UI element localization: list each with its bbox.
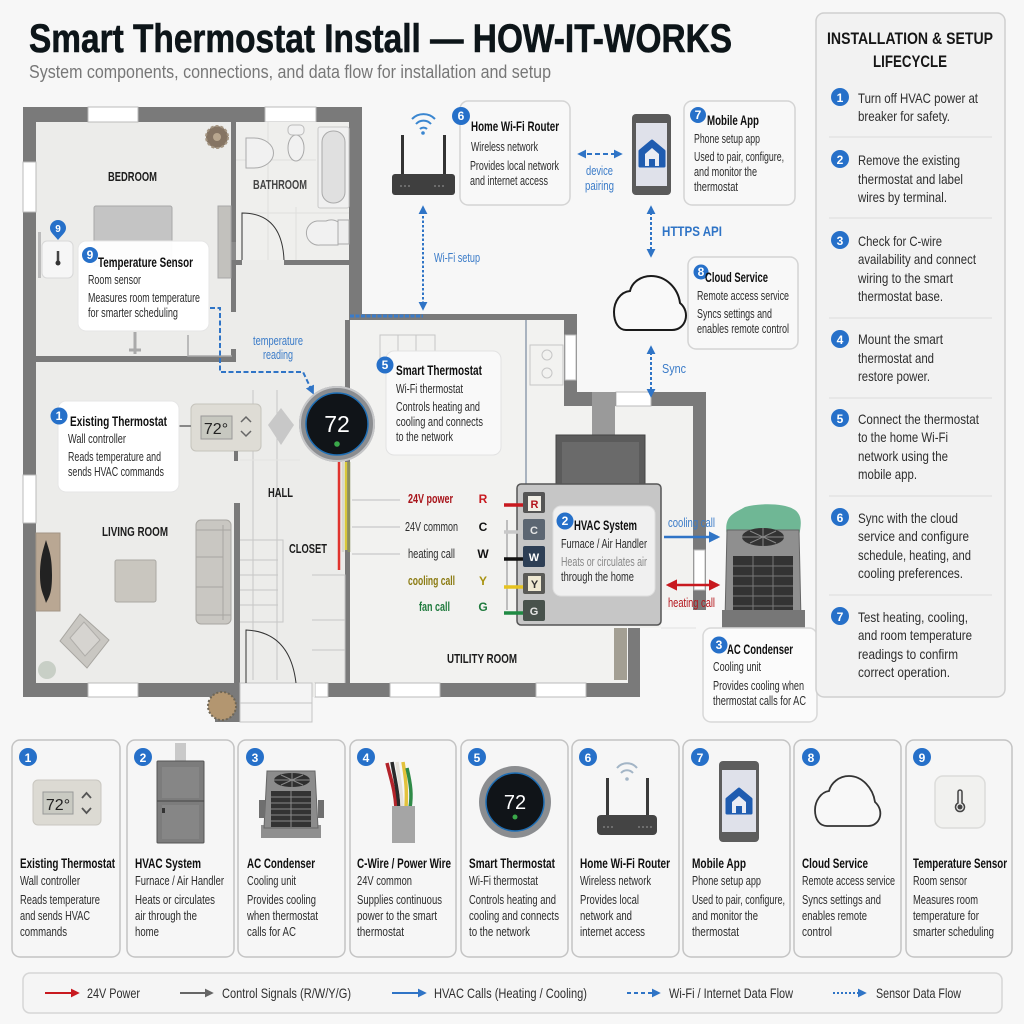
step 3: thermostat base. — [858, 288, 943, 304]
panel: hvac system box: through the home — [561, 570, 634, 584]
living room furniture — [36, 520, 236, 720]
card 4: c-wire: thermostat — [357, 925, 404, 939]
step 4: Mount the smart — [858, 331, 943, 347]
callout: smart thermostat: Wi-Fi thermostat — [396, 382, 463, 396]
card 3: ac condenser: Cooling unit — [247, 874, 296, 888]
callout: existing thermostat — [50, 401, 179, 492]
icon: wifi router — [392, 114, 455, 195]
windows — [23, 107, 705, 722]
callout: ac condenser: Cooling unit — [713, 660, 761, 674]
step 2: wires by terminal. — [857, 189, 947, 205]
icon: dial — [479, 766, 551, 838]
callout: home wifi router: Wireless network — [471, 140, 539, 154]
card 3: ac condenser: Provides cooling — [247, 893, 316, 907]
icon: furnace — [157, 761, 204, 843]
callout: existing thermostat: 1 — [56, 409, 63, 423]
step 3 — [831, 231, 976, 304]
card 2: hvac system: 2 — [140, 751, 147, 765]
step 3: 3 — [837, 234, 844, 248]
callout: existing thermostat: Existing Thermostat — [70, 413, 167, 429]
card 2: hvac system: Heats or circulates — [135, 893, 215, 907]
callout: cloud service: Syncs settings and — [697, 307, 772, 321]
room labels: CLOSET — [289, 541, 327, 556]
step 2: thermostat and label — [858, 171, 963, 187]
icon: temperature sensor on plan: 9 — [55, 224, 61, 235]
card 1: existing thermostat: and sends HVAC — [20, 909, 90, 923]
icon: ac condenser on plan — [722, 504, 805, 630]
card 8: cloud service: Cloud Service — [802, 855, 868, 871]
legend: sensor flow — [833, 985, 962, 1001]
title: Smart Thermostat Install — HOW-IT-WORKS — [29, 17, 732, 61]
callout: ac condenser — [703, 628, 817, 722]
callout: temperature sensor — [78, 241, 209, 331]
card 7: mobile app: Phone setup app — [692, 874, 761, 888]
icon: condenser — [259, 771, 324, 838]
wire labels: fan call — [419, 600, 450, 614]
step 7: Test heating, cooling, — [858, 609, 968, 625]
card 7: mobile app: thermostat — [692, 925, 739, 939]
icon: furnace — [556, 392, 645, 487]
card 9: temperature sensor: temperature for — [913, 909, 979, 923]
legend — [23, 973, 1002, 1013]
icon: mobile phone — [632, 114, 671, 195]
icon: sensor — [935, 776, 985, 828]
card 6: router: 6 — [585, 751, 592, 765]
step 5: mobile app. — [858, 466, 917, 482]
card 5: smart thermostat: Controls heating and — [469, 893, 556, 907]
icon: dial: 72 — [504, 792, 526, 814]
card 7: mobile app — [683, 740, 790, 957]
step 6: schedule, heating, and — [858, 547, 971, 563]
card 1: existing thermostat: commands — [20, 925, 67, 939]
card 3: ac condenser — [238, 740, 345, 957]
panel: installation lifecycle — [816, 13, 1005, 697]
card 6: router: Provides local — [580, 893, 639, 907]
step 4: 4 — [837, 333, 844, 347]
card 5: smart thermostat: cooling and connects — [469, 909, 559, 923]
wire labels: G — [478, 600, 488, 614]
step 7: correct operation. — [858, 664, 950, 680]
wire labels: heating call — [408, 547, 455, 561]
callout: mobile app: and monitor the — [694, 165, 757, 179]
panel: floor plan — [23, 107, 706, 722]
panel heading: LIFECYCLE — [873, 52, 947, 71]
callout: existing thermostat: sends HVAC commands — [68, 465, 164, 479]
card 5: smart thermostat: Wi-Fi thermostat — [469, 874, 538, 888]
sync arrow — [651, 347, 686, 396]
callout: cloud service: enables remote control — [697, 322, 789, 336]
temperature reading flow arrow: temperature — [253, 334, 303, 348]
card 5: smart thermostat — [461, 740, 568, 957]
panel: hvac system box: HVAC System — [574, 517, 637, 533]
step 2 — [831, 150, 963, 205]
c-wire bundle — [339, 462, 349, 570]
callout: home wifi router: 6 — [458, 109, 465, 123]
room labels: BEDROOM — [108, 169, 157, 184]
card 7: mobile app: 7 — [697, 751, 704, 765]
legend: wifi flow: Wi-Fi / Internet Data Flow — [669, 985, 794, 1001]
callout: smart thermostat — [376, 351, 501, 455]
hall and closet sketch — [240, 335, 627, 683]
temperature reading flow arrow: reading — [263, 348, 293, 362]
temperature reading flow arrow — [210, 308, 313, 393]
card 2: hvac system: air through the — [135, 909, 197, 923]
room labels: BATHROOM — [253, 177, 307, 192]
card 7: mobile app: Used to pair, configure, — [692, 893, 785, 907]
callout: ac condenser: Provides cooling when — [713, 679, 804, 693]
wire labels: 24V power — [408, 492, 453, 506]
step 4: thermostat and — [858, 350, 934, 366]
card 6: router: internet access — [580, 925, 645, 939]
card 1: existing thermostat — [12, 740, 120, 957]
bedroom furniture — [38, 126, 232, 356]
card 9: temperature sensor: 9 — [919, 751, 926, 765]
hvac to condenser arrows — [664, 516, 718, 610]
wire labels: C — [479, 520, 488, 534]
card 4: c-wire: 24V common — [357, 874, 412, 888]
callout: existing thermostat: Reads temperature and — [68, 450, 161, 464]
https api arrow — [651, 207, 722, 256]
step 5 — [831, 409, 979, 482]
wire labels: R — [479, 492, 488, 506]
card 3: ac condenser: calls for AC — [247, 925, 296, 939]
icon: cloud — [614, 276, 686, 330]
card 8: cloud service — [794, 740, 901, 957]
callout: smart thermostat: to the network — [396, 430, 454, 444]
card 5: smart thermostat: to the network — [469, 925, 531, 939]
terminal blocks: R — [531, 499, 539, 511]
icon: phone — [719, 761, 759, 842]
step 4: restore power. — [858, 368, 930, 384]
terminal blocks: W — [529, 552, 540, 564]
callout: smart thermostat: cooling and connects — [396, 415, 483, 429]
legend: control signals: Control Signals (R/W/Y/G) — [222, 985, 351, 1001]
device pairing arrow: device — [586, 164, 613, 178]
callout: mobile app: Used to pair, configure, — [694, 150, 784, 164]
room labels: LIVING ROOM — [102, 524, 168, 539]
icon: wall thermostat on plan — [179, 404, 294, 461]
callout: mobile app: 7 — [695, 108, 702, 122]
card 8: cloud service: 8 — [808, 751, 815, 765]
icon: thermostat — [33, 780, 101, 825]
wire labels: cooling call — [408, 574, 455, 588]
step 3: Check for C-wire — [858, 233, 942, 249]
https api arrow: HTTPS API — [662, 223, 722, 239]
callout: smart thermostat: 5 — [382, 358, 389, 372]
callout: temperature sensor: Measures room temperature — [88, 291, 200, 305]
wire labels: W — [477, 547, 489, 561]
device pairing arrow — [579, 154, 621, 193]
callout: home wifi router: Provides local network — [470, 159, 560, 173]
icon: router — [597, 763, 657, 835]
card 3: ac condenser: AC Condenser — [247, 855, 315, 871]
card 7: mobile app: Mobile App — [692, 855, 746, 871]
callout: mobile app — [684, 101, 795, 205]
panel: hvac system box: Furnace / Air Handler — [561, 537, 647, 551]
callout: ac condenser: AC Condenser — [727, 641, 793, 657]
terminal blocks: G — [530, 606, 538, 618]
icon: wall thermostat on plan: 72° — [204, 421, 228, 438]
callout: mobile app: thermostat — [694, 180, 738, 194]
step 3: wiring to the smart — [857, 270, 953, 286]
step 7: and room temperature — [858, 627, 972, 643]
legend: sensor flow: Sensor Data Flow — [876, 985, 962, 1001]
icon: cloud — [815, 776, 880, 826]
callout: ac condenser: 3 — [716, 638, 723, 652]
room labels: UTILITY ROOM — [447, 651, 517, 666]
card 6: router: network and — [580, 909, 632, 923]
step 7: readings to confirm — [858, 646, 958, 662]
hvac to condenser arrows: cooling call — [668, 516, 715, 530]
icon: smart thermostat dial: 72 — [324, 411, 350, 437]
card 4: c-wire: 4 — [363, 751, 370, 765]
card 9: temperature sensor — [906, 740, 1012, 957]
callout: temperature sensor: Room sensor — [88, 273, 141, 287]
card 1: existing thermostat: Reads temperature — [20, 893, 100, 907]
step 5: network using the — [858, 448, 948, 464]
card 8: cloud service: enables remote — [802, 909, 867, 923]
card 1: existing thermostat: 1 — [25, 751, 32, 765]
room labels — [102, 169, 517, 666]
callout: temperature sensor: Temperature Sensor — [98, 254, 193, 270]
step 5: 5 — [837, 412, 844, 426]
card 9: temperature sensor: Measures room — [913, 893, 978, 907]
icon: temperature sensor on plan — [42, 220, 73, 278]
hvac to condenser arrows: heating call — [668, 596, 715, 610]
card 7: mobile app: and monitor the — [692, 909, 758, 923]
step 5: to the home Wi-Fi — [858, 429, 948, 445]
callout: cloud service: Cloud Service — [705, 269, 768, 285]
wifi setup flow arrow: Wi-Fi setup — [434, 251, 480, 265]
callout: existing thermostat: Wall controller — [68, 432, 126, 446]
card 2: hvac system: Furnace / Air Handler — [135, 874, 224, 888]
card 1: existing thermostat: Wall controller — [20, 874, 80, 888]
card 3: ac condenser: 3 — [252, 751, 259, 765]
icon: wire bundle — [387, 762, 415, 843]
step 1: 1 — [837, 91, 844, 105]
callout: home wifi router — [452, 101, 570, 205]
legend: 24v power: 24V Power — [87, 985, 140, 1001]
card 6: router: Home Wi-Fi Router — [580, 855, 670, 871]
terminal wires — [504, 505, 528, 613]
step 6: cooling preferences. — [858, 565, 963, 581]
card 8: cloud service: Remote access service — [802, 874, 895, 888]
step 1: Turn off HVAC power at — [858, 90, 978, 106]
callout: mobile app: Phone setup app — [694, 132, 760, 146]
card 5: smart thermostat: 5 — [474, 751, 481, 765]
card 2: hvac system — [127, 740, 234, 957]
interior walls — [36, 122, 350, 722]
step 5: Connect the thermostat — [858, 411, 979, 427]
step 6: 6 — [837, 511, 844, 525]
sync arrow: Sync — [662, 362, 686, 376]
card 8: cloud service: Syncs settings and — [802, 893, 881, 907]
card 5: smart thermostat: Smart Thermostat — [469, 855, 555, 871]
card 9: temperature sensor: smarter scheduling — [913, 925, 994, 939]
callout: temperature sensor: 9 — [87, 248, 94, 262]
bathroom fixtures — [236, 122, 349, 260]
callout: temperature sensor: for smarter scheduling — [88, 306, 178, 320]
step 6: service and configure — [858, 528, 969, 544]
icon: thermostat: 72° — [46, 797, 70, 814]
card 4: c-wire — [350, 740, 456, 957]
subtitle: System components, connections, and data flow for installation and setup — [29, 62, 551, 82]
wire labels: Y — [479, 574, 487, 588]
panel: hvac system box: 2 — [562, 514, 569, 528]
callout: smart thermostat: Controls heating and — [396, 400, 480, 414]
card 1: existing thermostat: Existing Thermostat — [20, 855, 115, 871]
wire labels — [405, 492, 489, 614]
step 7 — [831, 607, 972, 680]
card 8: cloud service: control — [802, 925, 832, 939]
legend: 24v power — [45, 985, 140, 1001]
callout: cloud service: 8 — [698, 265, 705, 279]
step 2: 2 — [837, 153, 844, 167]
card 4: c-wire: power to the smart — [357, 909, 437, 923]
callout: smart thermostat: Smart Thermostat — [396, 362, 482, 378]
panel heading — [827, 29, 993, 71]
callout: ac condenser: thermostat calls for AC — [713, 694, 806, 708]
card 4: c-wire: Supplies continuous — [357, 893, 442, 907]
card 9: temperature sensor: Room sensor — [913, 874, 967, 888]
card 4: c-wire: C-Wire / Power Wire — [357, 855, 451, 871]
device pairing arrow: pairing — [585, 179, 614, 193]
step 6: Sync with the cloud — [858, 510, 958, 526]
terminal blocks: Y — [531, 579, 539, 591]
step 7: 7 — [837, 610, 844, 624]
step 6 — [831, 508, 971, 581]
terminal blocks: C — [530, 525, 538, 537]
step 1: breaker for safety. — [858, 108, 950, 124]
terminal blocks — [523, 492, 545, 621]
card 3: ac condenser: when thermostat — [246, 909, 318, 923]
callout: home wifi router: and internet access — [470, 174, 548, 188]
room labels: HALL — [268, 485, 293, 500]
step 3: availability and connect — [858, 251, 976, 267]
wifi setup flow arrow — [350, 207, 480, 316]
icon: smart thermostat dial — [299, 386, 375, 462]
legend: hvac calls: HVAC Calls (Heating / Cooling) — [434, 985, 587, 1001]
callout: cloud service: Remote access service — [697, 289, 789, 303]
card 6: router: Wireless network — [580, 874, 652, 888]
card 6: router — [572, 740, 679, 957]
callout: mobile app: Mobile App — [707, 112, 759, 128]
wire labels: 24V common — [405, 520, 458, 534]
card 2: hvac system: HVAC System — [135, 855, 201, 871]
callout: cloud service — [688, 257, 798, 349]
step 2: Remove the existing — [858, 152, 960, 168]
panel: hvac system box: Heats or circulates air — [561, 555, 647, 569]
panel heading: INSTALLATION & SETUP — [827, 29, 993, 48]
step 4 — [831, 330, 943, 384]
callout: home wifi router: Home Wi-Fi Router — [471, 118, 559, 134]
panel: hvac system box — [504, 484, 661, 625]
card 2: hvac system: home — [135, 925, 159, 939]
step 1 — [831, 88, 978, 124]
